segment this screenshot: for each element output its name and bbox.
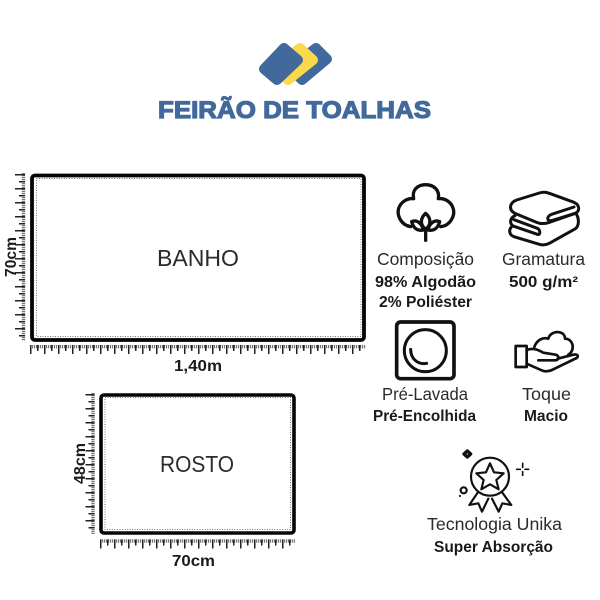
icon: washing machine drum xyxy=(397,322,454,379)
logo icon: stacked towels xyxy=(264,48,327,80)
feature: composição: 2% Poliéster xyxy=(379,294,472,311)
feature: gramatura xyxy=(502,192,585,291)
feature: tecnologia unika xyxy=(427,451,562,556)
banho width label: 1,40m xyxy=(174,358,222,375)
banho height label: 70cm xyxy=(3,237,20,277)
feature: composição: 98% Algodão xyxy=(375,274,476,291)
icon: hand holding cloud xyxy=(516,332,578,371)
feature: toque xyxy=(516,332,578,425)
toque text: Toque xyxy=(522,384,571,404)
rosto height label: 48cm xyxy=(72,443,89,484)
rosto label: ROSTO xyxy=(160,451,234,477)
banho towel outline xyxy=(32,176,364,340)
banho label: BANHO xyxy=(157,245,239,271)
banho inner stitching xyxy=(36,178,361,336)
panel: rosto towel diagram xyxy=(72,393,295,570)
feature: composição xyxy=(375,185,476,311)
feature: tecnologia unika: Super Absorção xyxy=(434,539,553,556)
rosto towel outline xyxy=(101,395,294,533)
icon: folded towels xyxy=(510,192,579,245)
feature: pré-lavada xyxy=(373,322,476,425)
gramatura text: Gramatura xyxy=(502,249,585,269)
tecnologia unika text: Tecnologia Unika xyxy=(427,514,562,534)
icon: award badge xyxy=(460,451,529,512)
banho horizontal ruler xyxy=(30,347,366,350)
panel: banho towel diagram xyxy=(3,173,366,375)
icon: cotton flower xyxy=(398,185,454,240)
feature: pré-lavada: Pré-Encolhida xyxy=(373,408,476,425)
logo: Feirão de Toalhas xyxy=(158,48,431,124)
feature: toque: Macio xyxy=(524,408,568,425)
rosto vertical ruler xyxy=(90,393,93,534)
rosto horizontal ruler xyxy=(100,541,295,544)
feature: gramatura: 500 g/m² xyxy=(509,274,578,291)
rosto width label: 70cm xyxy=(172,553,215,570)
composição text: Composição xyxy=(377,249,474,269)
rosto inner stitching xyxy=(105,398,290,530)
pré-lavada text: Pré-Lavada xyxy=(382,384,468,404)
logo wordmark: FEIRÃO DE TOALHAS xyxy=(158,96,431,124)
banho vertical ruler xyxy=(20,173,24,342)
